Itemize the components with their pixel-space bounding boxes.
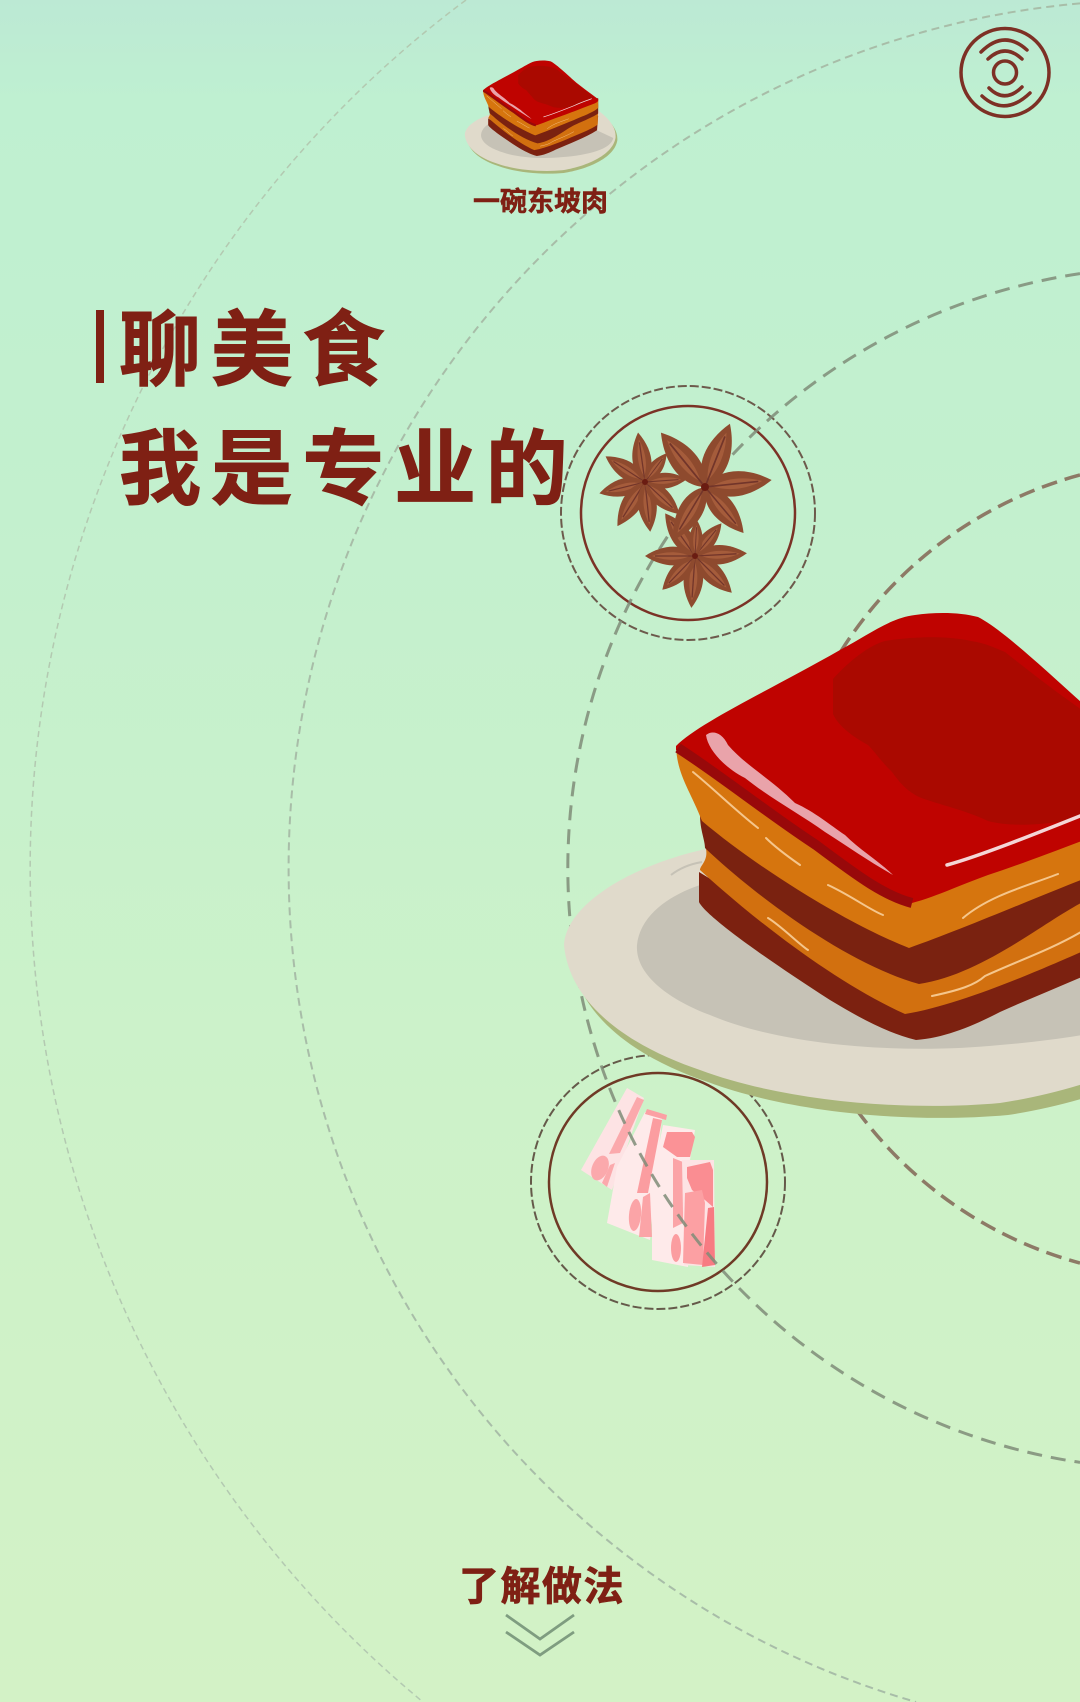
- icon: star anise: [597, 419, 773, 609]
- circle frame: star anise: [561, 386, 815, 640]
- circle frame: pork belly: [531, 1055, 785, 1309]
- arc: main dashed ring: [568, 274, 1080, 1462]
- title line 2: 我是专业的: [119, 424, 578, 516]
- icon: raw pork belly slices: [581, 1088, 715, 1267]
- icon: double chevron down: [506, 1615, 574, 1655]
- illustration: large Dongpo pork on plate: [564, 613, 1080, 1118]
- arc: inner brown dashed ring: [778, 475, 1080, 1263]
- title accent bar: [96, 310, 104, 383]
- call to action text: 了解做法: [459, 1565, 625, 1609]
- brand name: 一碗东坡肉: [473, 187, 608, 217]
- arc: second thin dashed ring: [289, 3, 1080, 1702]
- arc: outermost thin dashed ring: [30, 0, 466, 1702]
- pork cube: [676, 613, 1080, 1040]
- star anise lower: [645, 508, 747, 609]
- icon: round broadcast logo: [961, 28, 1049, 116]
- title line 1: 聊美食: [119, 306, 394, 396]
- star anise left: [597, 431, 687, 533]
- illustration: small Dongpo pork logo: [465, 60, 617, 174]
- plate: [564, 800, 1080, 1118]
- star anise large: [651, 419, 773, 546]
